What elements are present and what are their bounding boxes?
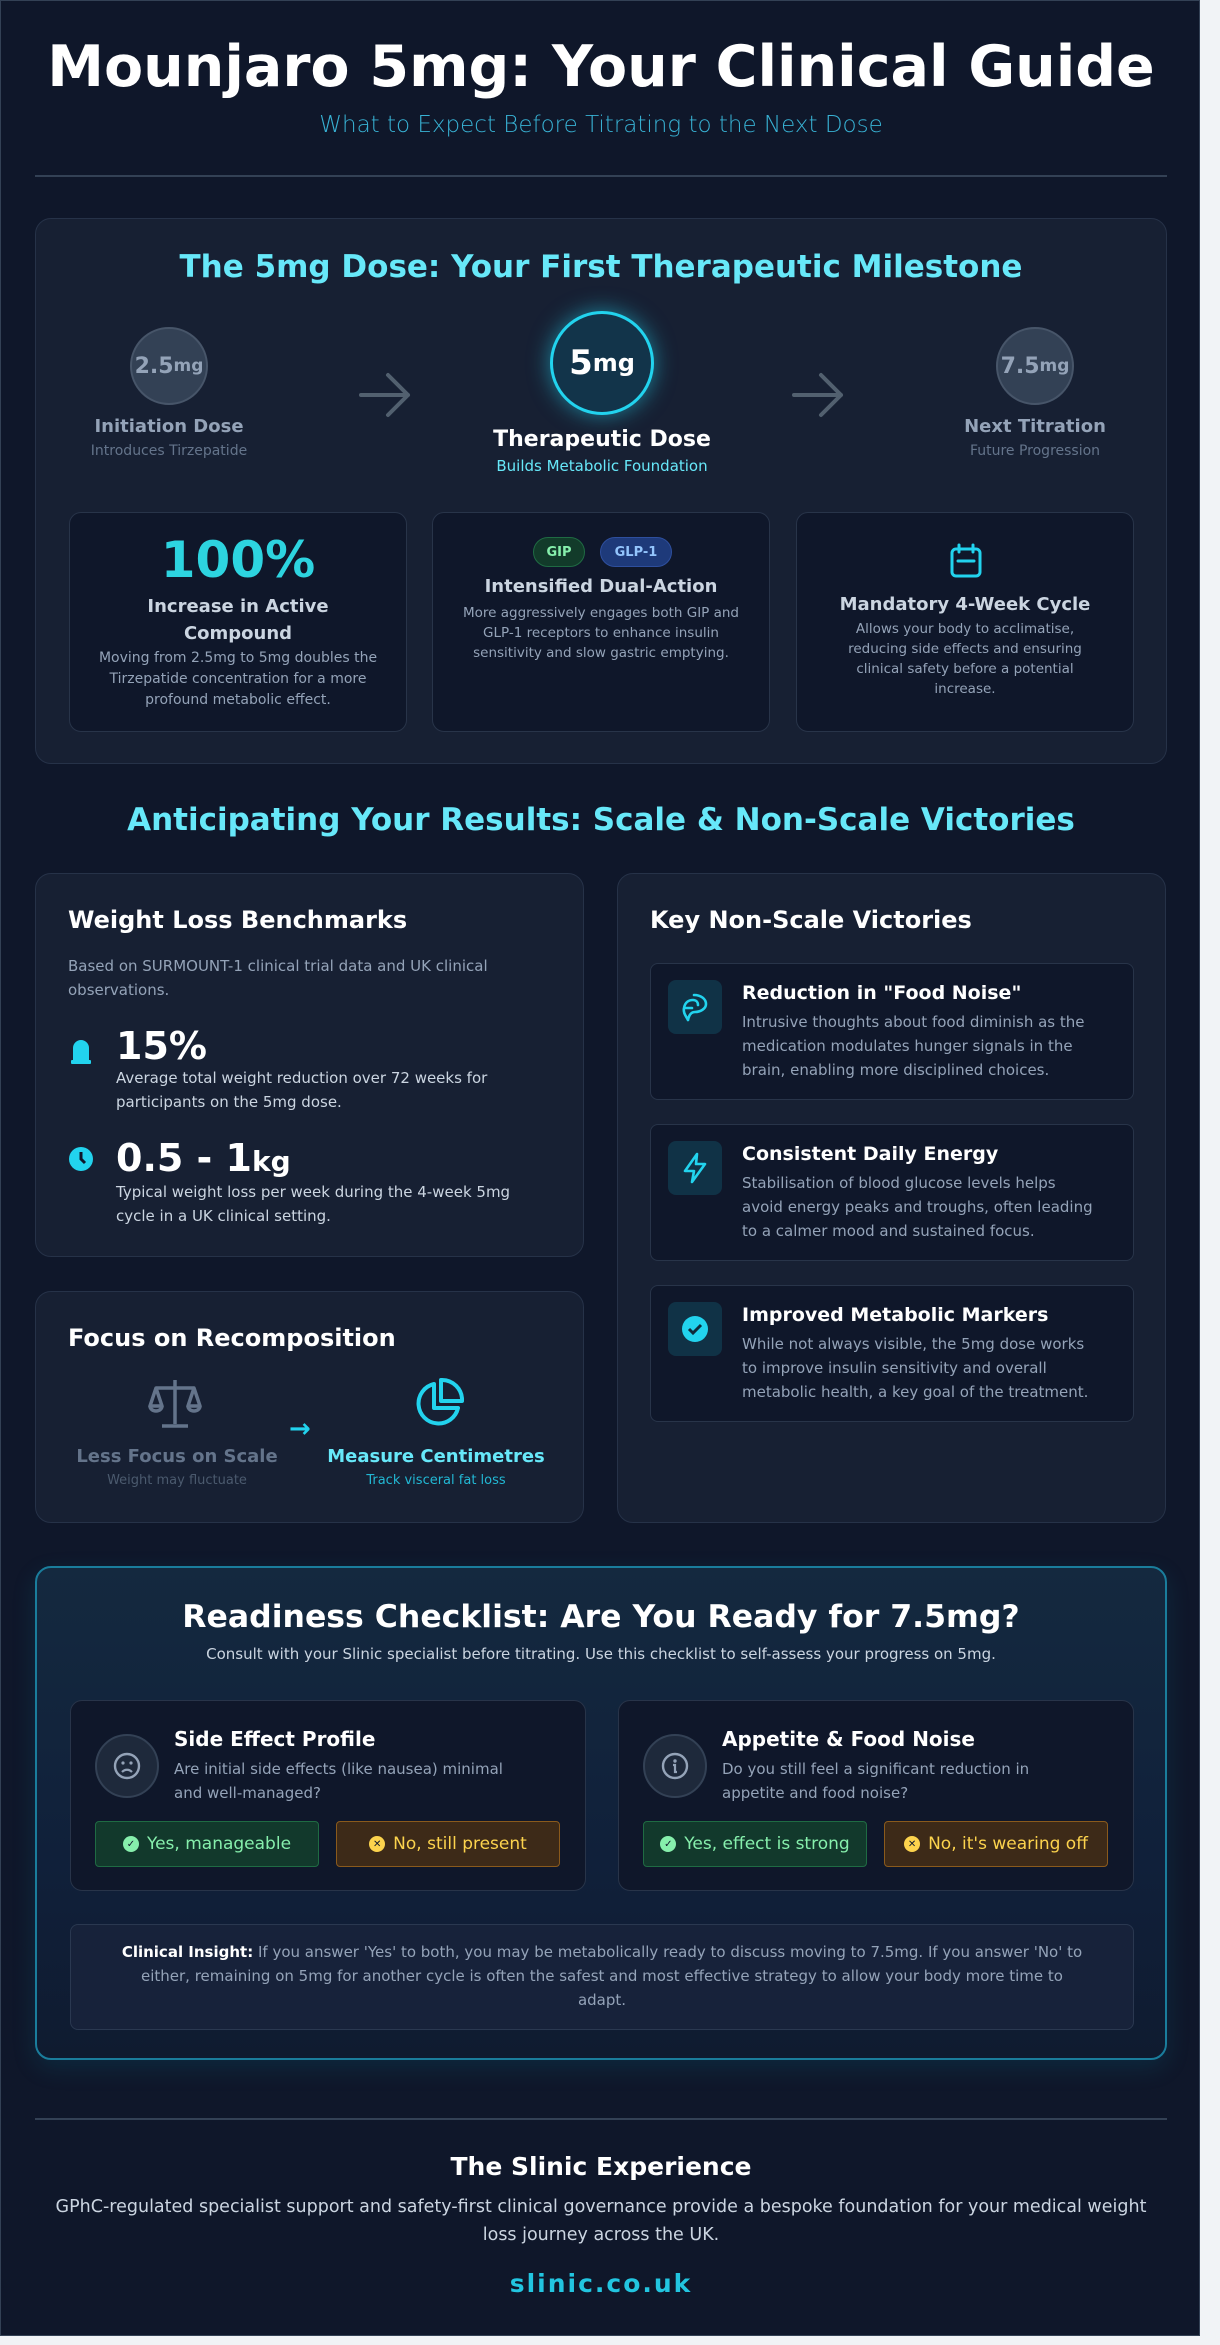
icon: scale bbox=[148, 1380, 202, 1428]
card: side effects: Are initial side effects (like nausea) minimal and well-managed? bbox=[174, 1760, 503, 1802]
card: 4-week cycle: Mandatory 4-Week Cycle bbox=[840, 594, 1090, 615]
callout: clinical insight bbox=[70, 1924, 1134, 2030]
item: energy: Stabilisation of blood glucose levels helps avoid energy peaks and troughs, often leading to a calmer mood and sustained focus. bbox=[742, 1174, 1093, 1240]
panel: 5mg dose milestone bbox=[35, 218, 1167, 764]
card: dual action: GLP-1 bbox=[615, 544, 657, 560]
panel: weight loss benchmarks: Based on SURMOUNT-1 clinical trial data and UK clinical observations. bbox=[68, 957, 488, 999]
dose step: 5mg: 5 bbox=[569, 343, 593, 383]
dose step: 7.5mg bbox=[964, 327, 1106, 459]
card: side effects: ✓ bbox=[127, 1838, 135, 1850]
card: appetite: ✕ bbox=[908, 1838, 916, 1850]
icon: bell bbox=[71, 1040, 91, 1064]
panel: non-scale victories bbox=[617, 873, 1166, 1523]
item: metabolic markers bbox=[650, 1285, 1134, 1422]
card: appetite bbox=[618, 1700, 1134, 1891]
item: energy bbox=[650, 1124, 1134, 1261]
card: side effects: Side Effect Profile bbox=[174, 1727, 375, 1751]
dose step: 7.5mg: mg bbox=[1040, 356, 1069, 376]
stat: 15% bbox=[71, 1024, 488, 1111]
arrow bbox=[359, 372, 410, 417]
panel: readiness checklist: Consult with your Slinic specialist before titrating. Use this checklist to self-assess your progress on 5mg. bbox=[206, 1645, 996, 1663]
card: 100% bbox=[69, 512, 407, 732]
callout: clinical insight: Clinical Insight: If you answer 'Yes' to both, you may be metabolically ready to discuss moving to 7.5mg. If you answer 'No' to either, remaining on 5mg for another cycle is often the safest and most effective strategy to allow your body more time to adapt. bbox=[122, 1943, 1082, 2009]
card: 4-week cycle bbox=[796, 512, 1134, 732]
dose step: 7.5mg: 7.5 bbox=[1001, 354, 1040, 378]
panel: weight loss benchmarks: Weight Loss Benchmarks bbox=[68, 906, 407, 934]
item: food noise bbox=[650, 963, 1134, 1100]
item: food noise: Reduction in "Food Noise" bbox=[742, 982, 1021, 1004]
dose step: 5mg bbox=[493, 298, 711, 475]
card: side effects: ✕ bbox=[373, 1838, 381, 1850]
card: side effects bbox=[70, 1700, 586, 1891]
card: dual action: Intensified Dual-Action bbox=[485, 576, 717, 597]
card: appetite: Yes, effect is strong bbox=[684, 1834, 850, 1854]
dose step: 5mg: Therapeutic Dose bbox=[493, 427, 711, 452]
panel: recomposition bbox=[35, 1291, 584, 1523]
panel: readiness checklist: Readiness Checklist: Are You Ready for 7.5mg? bbox=[182, 1599, 1020, 1635]
card: 100%: Moving from 2.5mg to 5mg doubles the Tirzepatide concentration for a more profound metabolic effect. bbox=[99, 650, 377, 708]
stat: 0.5-1kg bbox=[69, 1136, 510, 1225]
dose step: 5mg: Builds Metabolic Foundation bbox=[496, 457, 708, 475]
icon: calendar bbox=[950, 544, 982, 578]
dose step: 2.5mg: Introduces Tirzepatide bbox=[91, 443, 247, 459]
dose step: 2.5mg: Initiation Dose bbox=[94, 416, 244, 437]
item: metabolic markers: While not always visible, the 5mg dose works to improve insulin sensitivity and overall metabolic health, a key goal of the treatment. bbox=[742, 1335, 1088, 1401]
heading: milestone: The 5mg Dose: Your First Therapeutic Milestone bbox=[180, 249, 1022, 285]
arrow bbox=[792, 372, 843, 417]
title: Mounjaro 5mg: Your Clinical Guide bbox=[47, 34, 1155, 100]
card: side effects: No, still present bbox=[393, 1834, 527, 1854]
footer: GPhC-regulated specialist support and safety-first clinical governance provide a bespoke foundation for your medical weight loss journey across the UK. bbox=[56, 2197, 1146, 2245]
dose step: 5mg: mg bbox=[593, 349, 635, 377]
card: 4-week cycle: Allows your body to acclimatise, reducing side effects and ensuring clinical safety before a potential increase. bbox=[848, 621, 1082, 697]
footer: The Slinic Experience bbox=[450, 2152, 752, 2181]
panel: recomposition: Weight may fluctuate bbox=[107, 1473, 247, 1488]
dose step: 7.5mg: Next Titration bbox=[964, 416, 1106, 437]
heading: results: Anticipating Your Results: Scale & Non-Scale Victories bbox=[127, 802, 1075, 838]
icon: info bbox=[643, 1734, 707, 1798]
arrow: → bbox=[289, 1414, 311, 1444]
panel: recomposition: Track visceral fat loss bbox=[366, 1473, 506, 1488]
stat: 15%: 15% bbox=[116, 1024, 207, 1068]
footer: slinic.co.uk bbox=[510, 2269, 692, 2298]
card: appetite: Appetite & Food Noise bbox=[722, 1727, 975, 1751]
panel: recomposition: Less Focus on Scale bbox=[76, 1446, 278, 1467]
dose step: 2.5mg: 2.5 bbox=[135, 354, 174, 378]
item: food noise: Intrusive thoughts about food diminish as the medication modulates hunger signals in the brain, enabling more disciplined choices. bbox=[742, 1013, 1085, 1079]
footer bbox=[56, 2152, 1146, 2298]
card: dual action: GIP bbox=[546, 544, 572, 560]
panel: readiness checklist bbox=[35, 1566, 1167, 2060]
item: metabolic markers: Improved Metabolic Markers bbox=[742, 1304, 1048, 1326]
item: energy: Consistent Daily Energy bbox=[742, 1143, 998, 1165]
panel: recomposition: Measure Centimetres bbox=[327, 1446, 545, 1467]
card: side effects: Yes, manageable bbox=[147, 1834, 291, 1854]
panel: recomposition: Focus on Recomposition bbox=[68, 1324, 396, 1352]
card: dual action: More aggressively engages both GIP and GLP-1 receptors to enhance insulin sensitivity and slow gastric emptying. bbox=[463, 605, 739, 661]
icon: frown bbox=[95, 1734, 159, 1798]
stat: 15%: Average total weight reduction over 72 weeks for participants on the 5mg dose. bbox=[116, 1069, 487, 1111]
card: 100%: Increase in Active Compound bbox=[147, 596, 329, 644]
card: appetite: No, it's wearing off bbox=[928, 1834, 1088, 1854]
card: appetite: Do you still feel a significant reduction in appetite and food noise? bbox=[722, 1760, 1029, 1802]
panel: non-scale victories: Key Non-Scale Victories bbox=[650, 906, 972, 934]
stat: 0.5-1kg: Typical weight loss per week during the 4-week 5mg cycle in a UK clinical setting. bbox=[116, 1183, 510, 1225]
dose step: 2.5mg: mg bbox=[174, 356, 203, 376]
icon: pie chart bbox=[416, 1378, 464, 1426]
panel: weight loss benchmarks bbox=[35, 873, 584, 1257]
card: appetite: ✓ bbox=[664, 1838, 672, 1850]
subtitle: What to Expect Before Titrating to the Next Dose bbox=[319, 112, 883, 138]
dose step: 7.5mg: Future Progression bbox=[970, 443, 1100, 459]
card: dual action bbox=[432, 512, 770, 732]
dose step: 2.5mg bbox=[91, 327, 247, 459]
stat: 0.5-1kg: 0.5 - 1kg bbox=[116, 1136, 291, 1180]
card: 100%: 100% bbox=[161, 531, 315, 589]
icon: clock bbox=[69, 1147, 93, 1171]
